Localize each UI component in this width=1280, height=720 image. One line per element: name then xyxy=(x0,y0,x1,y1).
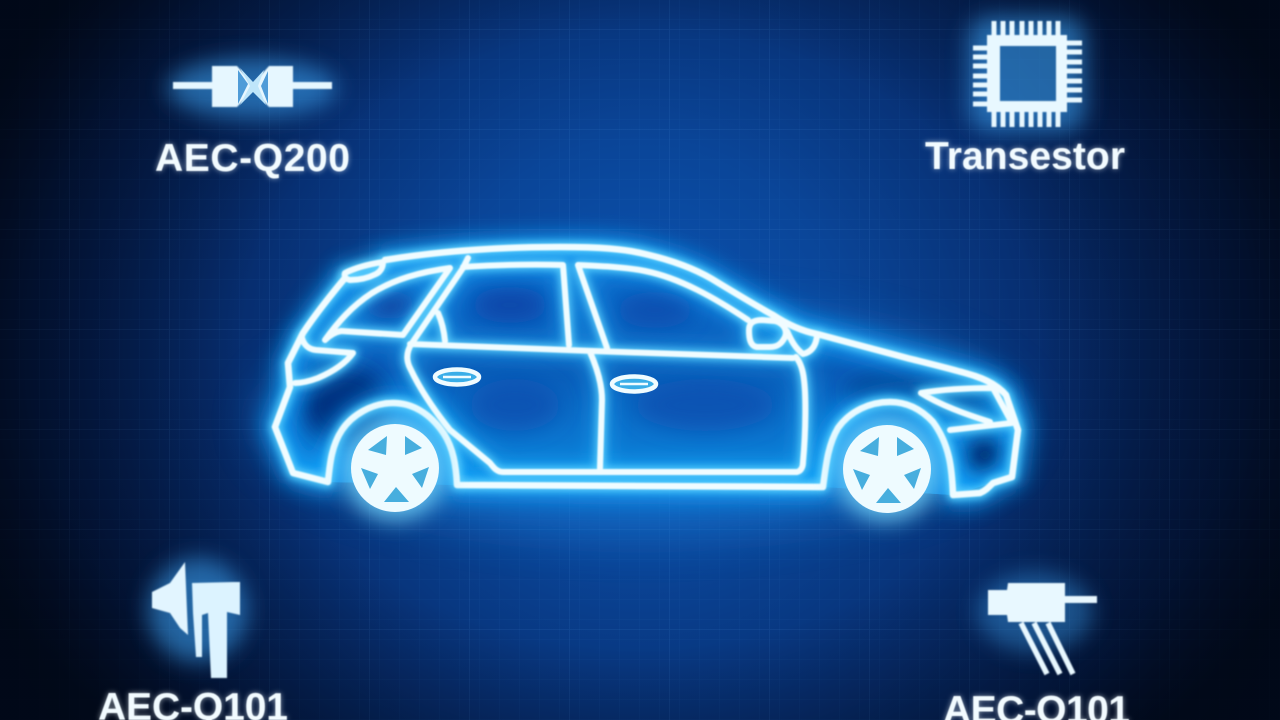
icon: microchip xyxy=(968,16,1086,132)
door handle: rear xyxy=(435,370,479,384)
label: Transestor: Transestor xyxy=(925,135,1125,178)
label: AEC-Q200: AEC-Q200 xyxy=(155,137,350,180)
icon group: Transestor chip xyxy=(925,16,1125,178)
icon: resistor xyxy=(167,58,337,118)
car body lines xyxy=(275,247,1018,495)
icon group: bottom-right AEC-Q101 xyxy=(943,572,1130,720)
car body fill and glow xyxy=(260,247,1020,530)
icon group: bottom-left AEC-Q101 xyxy=(98,558,288,720)
car: glowing neon side-view outline xyxy=(260,247,1020,530)
door handle: front xyxy=(612,376,656,392)
icon: transistor with three legs xyxy=(977,572,1097,674)
wheel: rear xyxy=(343,416,447,520)
car outer glow xyxy=(275,247,1018,495)
wheel: front xyxy=(835,417,939,521)
icon: component with leads xyxy=(148,558,248,678)
icon group: AEC-Q200 passive component xyxy=(155,58,350,180)
